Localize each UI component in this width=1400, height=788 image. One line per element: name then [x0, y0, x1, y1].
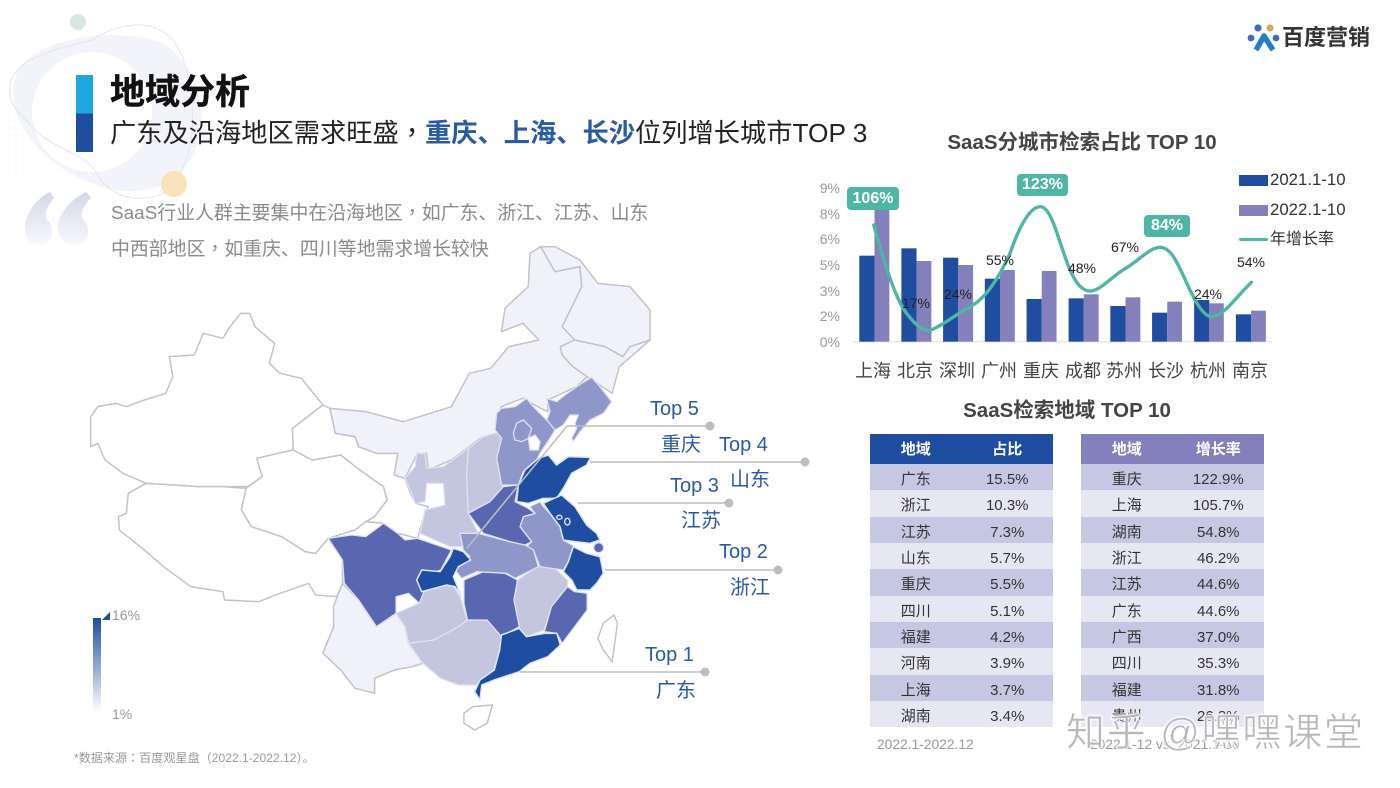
growth values: 24%	[1194, 286, 1222, 302]
title: 地域分析	[110, 73, 250, 112]
table: growth rate: 增长率	[1196, 441, 1241, 458]
table: growth rate: 湖南	[1112, 524, 1142, 541]
table section title: SaaS检索地域 TOP 10	[963, 399, 1171, 422]
table: growth rate: 31.8%	[1197, 682, 1240, 699]
growth values: 55%	[986, 252, 1014, 268]
legend top marker	[102, 612, 110, 620]
growth rate line	[874, 207, 1251, 330]
y axis labels: 3%	[820, 283, 840, 299]
source note: *数据来源：百度观星盘（2022.1-2022.12）。	[74, 749, 315, 766]
map: Henan and Shanghai	[468, 485, 604, 553]
table: growth rate: 105.7%	[1193, 497, 1244, 514]
label: Top 2: Top 2	[719, 541, 768, 563]
table: growth rate: 江苏	[1112, 576, 1142, 593]
label: Shandong: 山东	[730, 469, 770, 491]
label: Guangdong: 广东	[656, 680, 696, 702]
table: growth rate: 35.3%	[1197, 655, 1240, 672]
table: search share: 浙江	[901, 497, 931, 514]
table: growth rate: 46.2%	[1197, 550, 1240, 567]
leader dots	[700, 422, 810, 676]
legend: 2021: 2021.1-10	[1270, 170, 1346, 189]
table: growth rate	[1081, 434, 1264, 727]
x axis city labels: 南京	[1232, 361, 1268, 381]
table: growth rate: 重庆	[1112, 471, 1142, 488]
table: growth rate: 福建	[1112, 682, 1142, 699]
label: Top 5: Top 5	[650, 398, 699, 420]
x axis city labels: 北京	[897, 361, 933, 381]
table: search share	[870, 434, 1053, 727]
growth values	[902, 239, 1265, 311]
legend: 2022: 2022.1-10	[1270, 200, 1346, 219]
y axis labels: 2%	[820, 308, 840, 324]
legend max value: 16%	[112, 607, 140, 623]
table: search share: 占比	[992, 441, 1022, 458]
table: search share: 广东	[901, 471, 931, 488]
growth values: 54%	[1237, 254, 1265, 270]
table: search share: 3.4%	[990, 708, 1024, 725]
decorative background blob	[2, 14, 202, 244]
table note: right: 2022.1-12 vs. 2021.1-10	[1090, 737, 1240, 752]
map: mid-share provinces	[455, 377, 612, 578]
growth tag: 123%: 123%	[1022, 176, 1063, 193]
table: search share: 重庆	[901, 576, 931, 593]
map: southern low-share provinces	[396, 565, 567, 685]
table: growth rate: 四川	[1112, 655, 1142, 672]
x axis city labels: 苏州	[1106, 361, 1142, 381]
table: growth rate: 贵州	[1112, 708, 1142, 725]
table: growth rate: 广西	[1112, 629, 1142, 646]
table: search share: 5.1%	[990, 603, 1024, 620]
subtitle: 广东及沿海地区需求旺盛，重庆、上海、长沙位列增长城市TOP 3	[110, 112, 867, 150]
x axis city labels	[855, 361, 1268, 381]
legend: growth rate	[1239, 230, 1334, 248]
growth tag: 84%	[1144, 215, 1190, 237]
logo text: 百度营销	[1282, 25, 1370, 50]
map scale legend	[93, 607, 140, 722]
y axis labels: 9%	[820, 180, 840, 196]
table: growth rate: 44.6%	[1197, 576, 1240, 593]
map: northern low-share provinces	[405, 432, 503, 547]
label: Zhejiang: 浙江	[730, 577, 770, 599]
y axis labels: 6%	[820, 231, 840, 247]
bars: 2022	[874, 210, 1266, 342]
table: search share: 山东	[901, 550, 931, 567]
chart legend	[1239, 170, 1346, 248]
growth values: 24%	[944, 286, 972, 302]
label: Top 1: Top 1	[645, 644, 694, 666]
table: search share: 15.5%	[986, 471, 1029, 488]
y axis labels	[820, 180, 840, 350]
growth values: 48%	[1068, 260, 1096, 276]
watermark: 知乎 @嘿嘿课堂	[1066, 712, 1365, 755]
leader lines	[467, 426, 805, 672]
description text: 中西部地区，如重庆、四川等地需求增长较快	[111, 234, 489, 260]
table: growth rate: 上海	[1112, 497, 1142, 514]
logo	[1248, 24, 1370, 52]
x axis city labels: 杭州	[1190, 361, 1226, 381]
map: top provinces	[417, 455, 603, 597]
growth values: 17%	[902, 295, 930, 311]
icon: logo mark	[1248, 24, 1280, 52]
growth tag: 84%: 84%	[1151, 217, 1183, 234]
title accent bar	[76, 75, 93, 152]
table: growth rate: 122.9%	[1193, 471, 1244, 488]
description text: SaaS行业人群主要集中在沿海地区，如广东、浙江、江苏、山东	[111, 198, 648, 225]
table: growth rate: 广东	[1112, 603, 1142, 620]
label: Top 4: Top 4	[719, 434, 768, 456]
y axis labels: 8%	[820, 206, 840, 222]
legend: growth rate: 年增长率	[1270, 231, 1334, 248]
table: search share: 5.7%	[990, 550, 1024, 567]
growth tag: 106%: 106%	[853, 190, 893, 207]
y axis labels: 0%	[820, 334, 840, 350]
table: search share: 河南	[901, 655, 931, 672]
table: growth rate: 37.0%	[1197, 629, 1240, 646]
legend gradient bar	[93, 618, 101, 712]
map: unshaded western provinces	[91, 313, 617, 730]
table: growth rate: 44.6%	[1197, 603, 1240, 620]
table: search share: 江苏	[901, 524, 931, 541]
x axis city labels: 深圳	[939, 361, 975, 381]
table: search share: 上海	[901, 682, 931, 699]
table: search share: 5.5%	[990, 576, 1024, 593]
table: growth rate: 54.8%	[1197, 524, 1240, 541]
y axis labels: 5%	[820, 257, 840, 273]
map: Jiangsu lakes	[557, 515, 570, 525]
growth tag: 106%	[847, 187, 899, 210]
table: search share: 福建	[901, 629, 931, 646]
table: search share: 3.7%	[990, 682, 1024, 699]
label: Chongqing: 重庆	[661, 434, 701, 456]
table: search share: 湖南	[901, 708, 931, 725]
table: growth rate: 地域	[1112, 441, 1142, 458]
description text	[111, 198, 648, 260]
label: Top 3: Top 3	[670, 475, 719, 497]
table note: left: 2022.1-2022.12	[877, 737, 974, 752]
table: search share: 3.9%	[990, 655, 1024, 672]
table: search share: 4.2%	[990, 629, 1024, 646]
bars: 2021	[859, 248, 1251, 342]
x axis city labels: 成都	[1065, 361, 1101, 381]
x axis city labels: 长沙	[1148, 361, 1184, 381]
x axis city labels: 重庆	[1023, 361, 1059, 381]
table: search share: 四川	[901, 603, 931, 620]
label: Jiangsu: 江苏	[681, 510, 721, 532]
map: southern upper-mid provinces	[328, 523, 587, 643]
map: palest provinces	[323, 247, 650, 693]
map: Guangdong	[475, 628, 560, 700]
x axis city labels: 广州	[981, 361, 1017, 381]
growth values: 67%	[1111, 239, 1139, 255]
growth tag: 123%	[1017, 174, 1068, 196]
table: search share: 地域	[901, 441, 931, 458]
table: search share: 10.3%	[986, 497, 1029, 514]
x axis city labels: 上海	[855, 361, 891, 381]
table: search share: 7.3%	[990, 524, 1024, 541]
table: growth rate: 浙江	[1112, 550, 1142, 567]
chart title: SaaS分城市检索占比 TOP 10	[947, 131, 1217, 154]
table: growth rate: 26.3%	[1197, 708, 1240, 725]
legend min value: 1%	[112, 706, 132, 722]
